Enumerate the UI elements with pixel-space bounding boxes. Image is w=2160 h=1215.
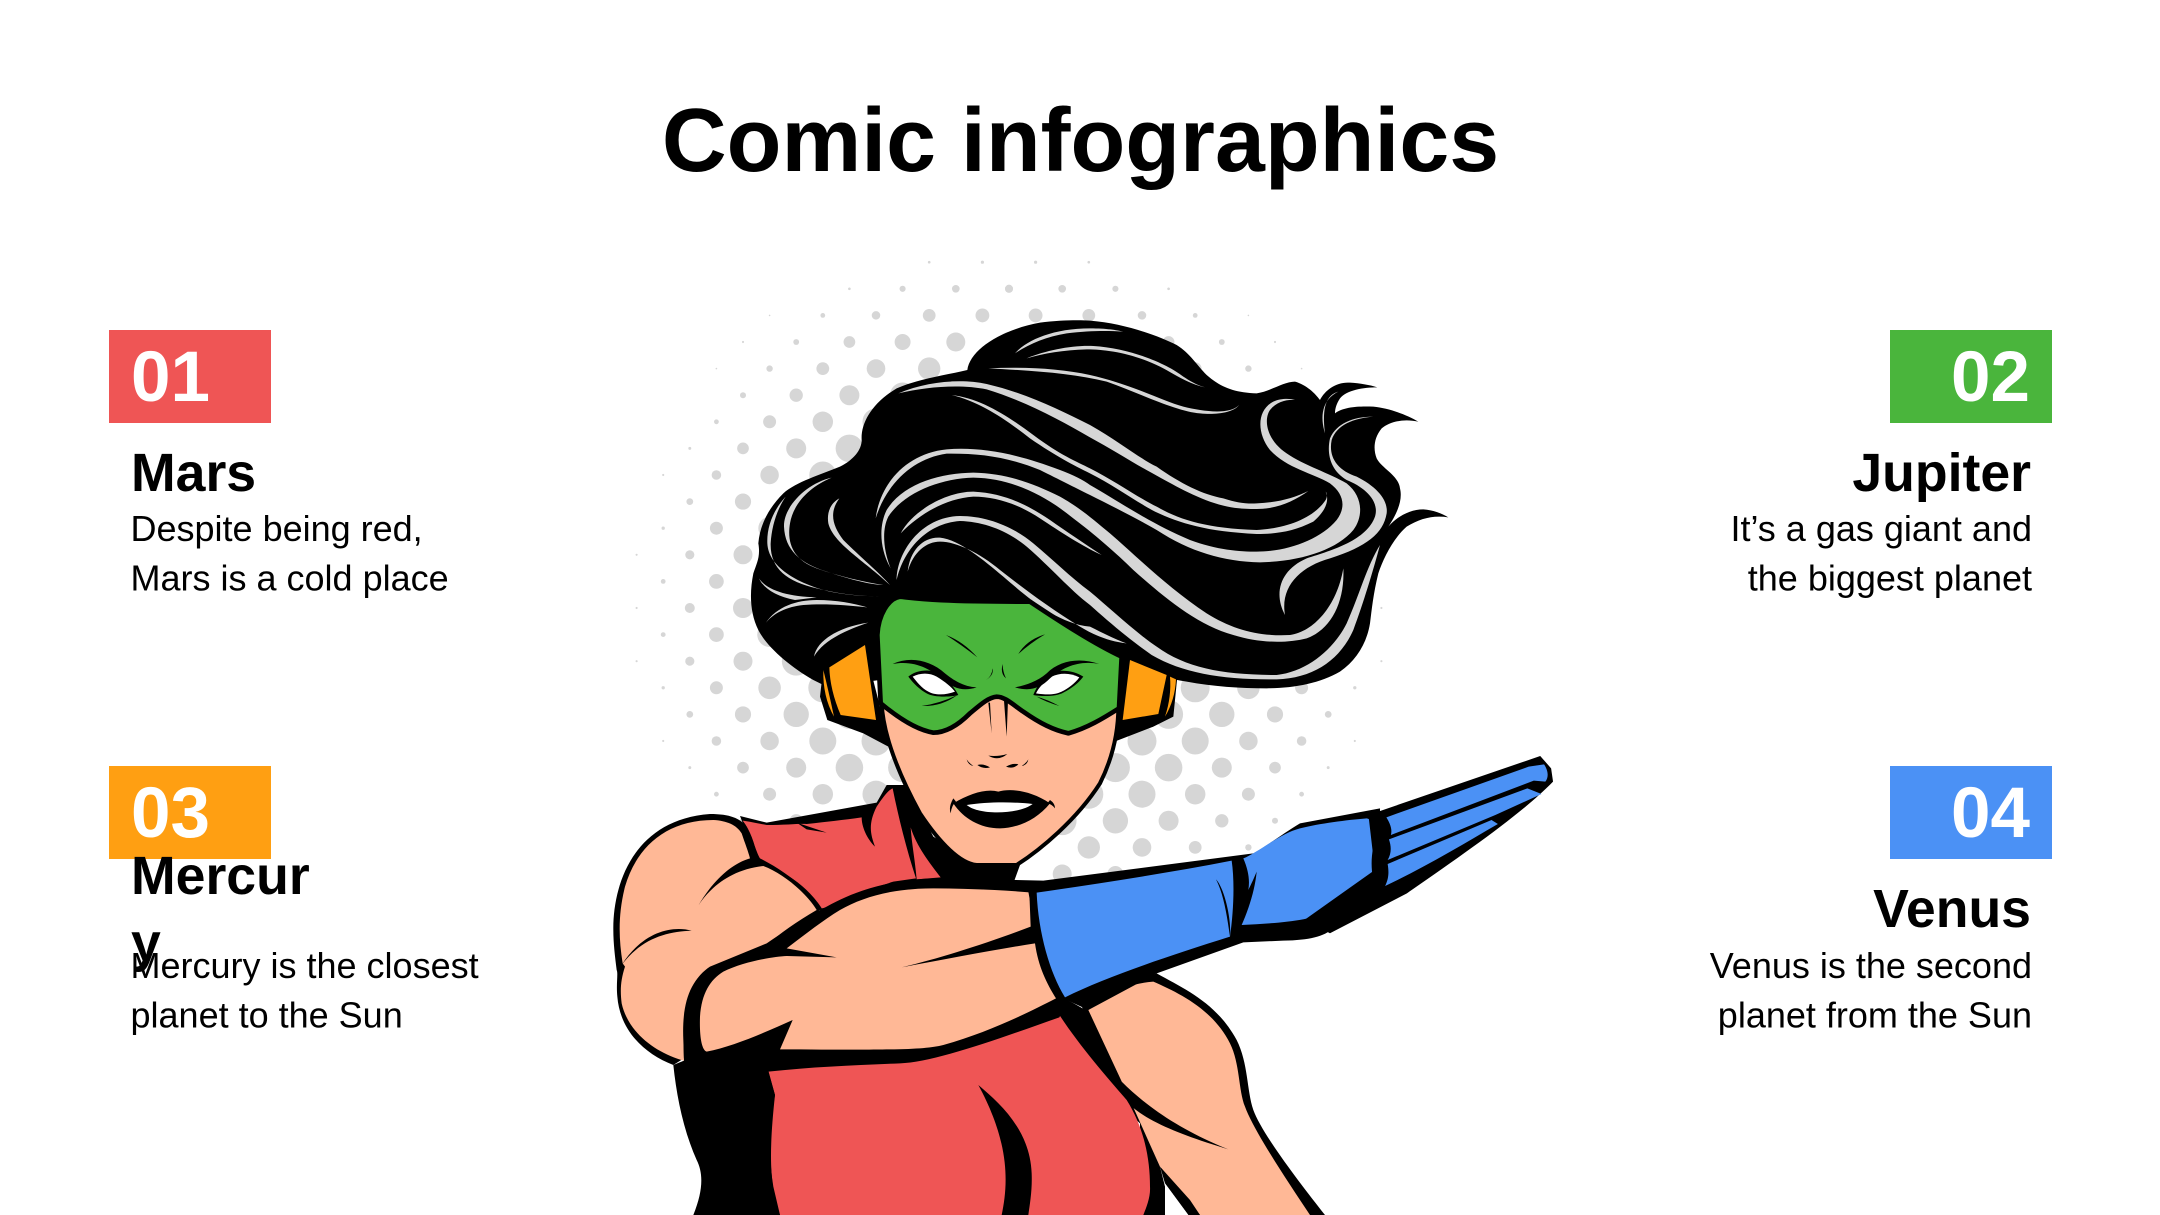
text Mercury: Mercury is the closest xyxy=(130,945,479,986)
mask eyes and brows xyxy=(908,671,958,697)
near arm shoulder xyxy=(613,814,822,1065)
text Venus: planet from the Sun xyxy=(1718,994,2032,1036)
heading Mars: Mars xyxy=(131,443,256,503)
forearm skin xyxy=(700,888,1056,1052)
item 04: Venus xyxy=(1710,766,2052,1036)
earmuffs xyxy=(820,642,1177,748)
text Mercury: planet to the Sun xyxy=(130,994,403,1036)
text Mars: Mars is a cold place xyxy=(130,558,449,598)
title: Comic infographics xyxy=(662,91,1499,191)
number badge 01 xyxy=(109,330,271,423)
heading Mercury: Mercur xyxy=(131,846,310,906)
superhero illustration xyxy=(613,320,1553,1215)
text Mars: Despite being red, xyxy=(130,508,423,549)
nose and lines xyxy=(967,700,1028,768)
hair highlights xyxy=(759,328,1387,679)
mouth xyxy=(953,790,1050,828)
heading Jupiter: Jupiter xyxy=(1852,443,2031,503)
number badge 03: 03 xyxy=(131,774,210,853)
neck and collar xyxy=(740,785,1033,923)
hair xyxy=(751,320,1448,688)
item 01: Mars xyxy=(109,330,449,598)
red dress xyxy=(768,1013,1150,1215)
halftone dot background xyxy=(636,261,1382,883)
text Jupiter: It’s a gas giant and xyxy=(1730,508,2032,549)
item 03: Mercury xyxy=(109,766,479,1036)
number badge 04 xyxy=(1890,766,2052,859)
torso and arms xyxy=(613,808,1380,1215)
number badge 04: 04 xyxy=(1951,774,2031,853)
far arm xyxy=(1080,973,1325,1215)
hand fingers xyxy=(1304,756,1553,933)
forearm outline and side shadow xyxy=(673,878,1067,1215)
number badge 02: 02 xyxy=(1951,338,2030,417)
dress fold xyxy=(978,1085,1032,1215)
heading Mercury: y xyxy=(131,913,161,973)
item 02: Jupiter xyxy=(1730,330,2052,598)
number badge 03 xyxy=(109,766,271,859)
text Jupiter: the biggest planet xyxy=(1748,558,2032,598)
number badge 02 xyxy=(1890,330,2052,423)
dress side strip xyxy=(760,998,1165,1215)
mask xyxy=(877,597,1122,733)
blue glove xyxy=(1013,808,1380,1010)
number badge 01: 01 xyxy=(131,338,210,417)
face xyxy=(882,680,1118,865)
text Venus: Venus is the second xyxy=(1710,945,2032,986)
heading Venus: Venus xyxy=(1873,879,2031,939)
